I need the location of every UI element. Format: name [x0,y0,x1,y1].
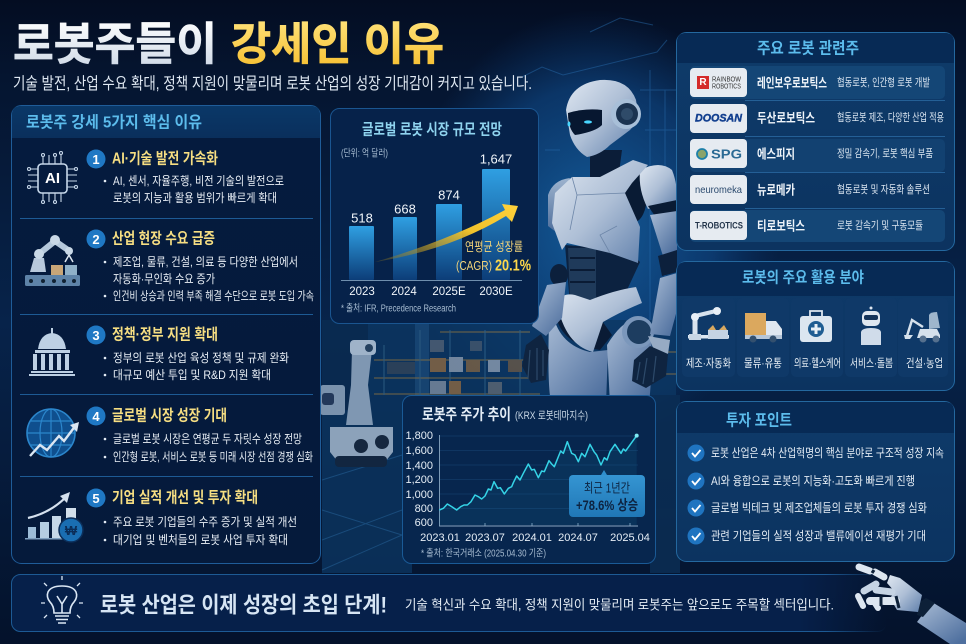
panel: market size bar chart [330,108,538,324]
chart source: * 출처: IFR, Precedence Research [341,302,456,314]
stock: SPG: SPG [711,146,742,162]
point 1 [688,444,944,462]
banner description: 기술 혁신과 수요 확대, 정책 지원이 맞물리며 로봇주는 앞으로도 주목할 섹터입니다. [405,598,834,612]
stocks header [677,33,954,63]
stock: Doosan Robotics: 두산로보틱스 [757,110,815,126]
stock: Rainbow Robotics: RAINBOW [712,74,742,84]
stock: Rainbow Robotics: ROBOTICS [712,82,741,90]
title [13,18,444,70]
point 2 [688,472,915,490]
y axis labels: 1,400 [405,460,433,472]
stock: Neuromeka: 뉴로메카 [757,182,795,198]
bar values: 1,647 [480,152,512,166]
x axis labels: 2025.04 [610,532,650,544]
panel: robot stock price trend [402,396,656,564]
chart heading: 글로벌 로봇 시장 규모 전망 [362,120,502,138]
reason 2: 산업 현장 수요 급증 [112,230,215,248]
point 3 [688,500,927,516]
field: logistics [737,298,789,377]
invest heading: 투자 포인트 [726,412,792,430]
robot neck [590,150,622,190]
panel: key robot stocks [676,32,954,250]
bar values [351,152,512,226]
stock heading: 로봇주 주가 추이 [422,406,511,424]
field: healthcare: 의료·헬스케어 [794,357,841,370]
year labels: 2030E [479,286,513,298]
icon: growth bars with won coin: ₩ [65,523,78,538]
year labels: 2025E [432,286,466,298]
panel: application fields [676,262,954,390]
palm [887,575,922,612]
x axis labels [420,532,650,544]
forearm [917,602,966,644]
y axis labels: 800 [415,503,433,515]
warehouse scene [322,320,680,573]
stock heading [422,406,588,424]
icon: light bulb [41,576,83,623]
fields header [677,262,954,296]
stock line [439,434,639,525]
reason 4: 글로벌 로봇 시장은 연평균 두 자릿수 성장 전망 [113,432,302,446]
reason 3 [29,326,289,382]
robot chest [552,160,648,263]
bar values: 518 [351,210,373,226]
x axis labels: 2024.07 [558,532,598,544]
x axis labels: 2023.07 [465,532,505,544]
stock: Doosan Robotics: DOOSAN [695,112,743,124]
stock callout: 최근 1년간 [584,480,630,496]
year labels: 2024 [391,286,417,298]
field: construction agriculture [898,298,948,377]
stock: Neuromeka: 협동로봇 및 자동화 솔루션 [837,183,930,196]
title: 로봇주들이 [13,18,217,70]
reason 4: 인간형 로봇, 서비스 로봇 등 미래 시장 선점 경쟁 심화 [113,450,313,464]
reason 1: 1 [92,152,100,167]
bar values: 874 [438,188,460,202]
stock: Neuromeka: neuromeka [695,184,742,196]
stock: Neuromeka [690,175,930,204]
reason 2: 2 [92,232,100,247]
wrist [917,598,935,617]
point 2: AI와 융합으로 로봇의 지능화·고도화 빠르게 진행 [711,473,915,488]
icon: growth bars with won coin [25,492,83,542]
stock: Rainbow Robotics: 협동로봇, 인간형 로봇 개발 [837,76,930,89]
y axis labels: 600 [415,517,433,529]
main humanoid robot [522,80,677,404]
robot legs [548,315,654,404]
panel: 5 core reasons [12,106,320,564]
stock heading: (KRX 로봇테마지수) [515,409,588,422]
reason 3: 대규모 예산 투입 및 R&D 지원 확대 [113,368,271,382]
reason 5: 주요 로봇 기업들의 수주 증가 및 실적 개선 [113,515,297,529]
y axis labels: 1,800 [405,430,433,442]
y axis labels: 1,000 [405,489,433,501]
panel header [12,106,320,138]
field: logistics: 물류·유통 [744,357,782,370]
reason 2 [25,230,314,303]
stock: T-Robotics: 로봇 감속기 및 구동모듈 [837,219,923,232]
field: manufacturing [682,298,735,377]
y axis labels [405,430,433,529]
reason 5 [25,488,297,547]
field: manufacturing: 제조·자동화 [686,357,731,370]
robot left arm [522,178,570,383]
robot head [566,80,641,157]
field: construction agriculture: 건설·농업 [906,357,943,370]
y axis labels: 1,200 [405,474,433,486]
stock: Doosan Robotics [690,104,944,133]
icon: globe with rising arrow [27,409,79,457]
reason 3: 3 [92,328,100,343]
reason 2: 제조업, 물류, 건설, 의료 등 다양한 산업에서 [113,255,298,269]
x axis labels: 2024.01 [512,532,552,544]
reason 5: 기업 실적 개선 및 투자 확대 [112,488,258,506]
icon: capitol building [29,328,75,376]
point 4: 관련 기업들의 실적 성장과 밸류에이션 재평가 기대 [711,529,926,543]
point 4 [688,528,926,544]
reason 1: 로봇의 지능과 활용 범위가 빠르게 확대 [113,191,277,205]
year labels [349,286,513,298]
subtitle: 기술 발전, 산업 수요 확대, 정책 지원이 맞물리며 로봇 산업의 성장 기대감이 커지고 있습니다. [13,74,532,93]
icon: robot arm on conveyor [25,235,80,286]
reason 4: 4 [92,409,100,424]
field: service care [845,298,897,377]
stock: T-Robotics [690,211,923,240]
stock callout [569,470,645,517]
bars [349,169,510,280]
stock: T-Robotics: 티로보틱스 [757,218,805,234]
robot hand at bottom right [858,567,966,644]
icon: AI chip [28,152,78,204]
field: service care: 서비스·돌봄 [850,357,893,370]
reason 3: 정부의 로봇 산업 육성 정책 및 규제 완화 [113,350,289,365]
reason 1: AI, 센서, 자율주행, 비전 기술의 발전으로 [113,173,284,188]
banner headline: 로봇 산업은 이제 성장의 초입 단계! [100,592,387,618]
reason 4 [27,406,313,464]
stock: SPG [690,139,933,168]
stock: Rainbow Robotics: R [699,77,707,88]
stock: Rainbow Robotics [690,68,930,97]
reason 5: 5 [92,491,100,506]
panel heading: 로봇주 강세 5가지 핵심 이유 [26,112,202,132]
panel: bottom takeaway banner [12,574,886,632]
invest header [677,402,954,433]
stock: Rainbow Robotics: 레인보우로보틱스 [757,76,827,90]
reason 4: 글로벌 시장 성장 기대 [112,406,227,424]
reason 2: 자동화·무인화 수요 증가 [113,272,215,286]
year labels: 2023 [349,286,375,298]
y axis labels: 1,600 [405,445,433,457]
CAGR callout: (CAGR) [456,259,492,273]
CAGR callout: 연평균 성장률 [465,240,523,254]
robot right arm [621,165,677,388]
field: healthcare [791,298,843,377]
x axis labels: 2023.01 [420,532,460,544]
robot pelvis [557,287,642,352]
stock: SPG: 정밀 감속기, 로봇 핵심 부품 [837,147,933,160]
fields heading: 로봇의 주요 활용 분야 [742,268,864,286]
CAGR callout [456,240,531,274]
reason 1: AI·기술 발전 가속화 [112,150,218,168]
chart unit note: (단위: 억 달러) [341,146,388,160]
stock callout: +78.6% 상승 [576,497,638,513]
service robot in warehouse [320,340,393,467]
robot torso core [565,245,640,305]
reason 5: 대기업 및 벤처들의 로봇 사업 투자 확대 [113,533,288,547]
stock source: * 출처: 한국거래소 (2025.04.30 기준) [421,548,546,560]
icon: AI chip: AI [45,170,60,187]
stock: SPG: 에스피지 [757,146,795,162]
stocks heading: 주요 로봇 관련주 [757,40,859,58]
panel: investment points [676,402,954,562]
CAGR callout: 20.1% [495,258,531,274]
reason 2: 인건비 상승과 인력 부족 해결 수단으로 로봇 도입 가속 [113,289,314,303]
fingers [859,567,884,577]
point 3: 글로벌 빅테크 및 제조업체들의 로봇 투자 경쟁 심화 [711,501,927,515]
reason 1 [28,150,284,205]
stock: T-Robotics: T-ROBOTICS [695,220,743,232]
growth arrow [375,204,518,262]
bar values: 668 [394,202,416,216]
reason 3: 정책·정부 지원 확대 [112,326,218,344]
title: 강세인 이유 [231,18,444,70]
